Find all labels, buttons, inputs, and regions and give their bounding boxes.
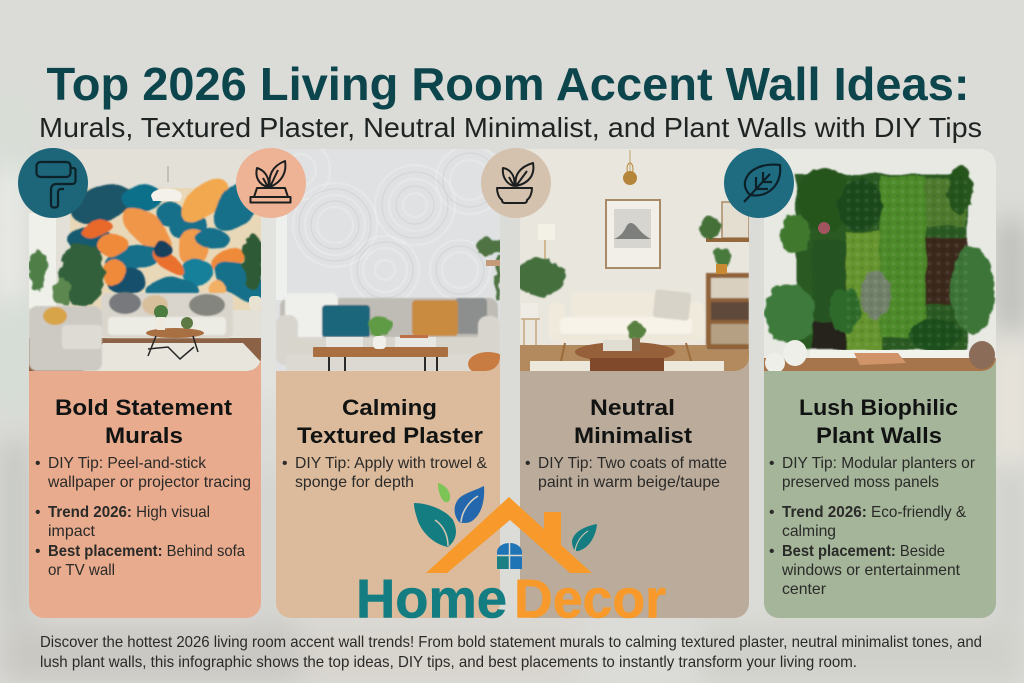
heading: Neutral <box>590 395 675 420</box>
heading <box>297 395 483 448</box>
tips: sponge for depth <box>295 474 414 491</box>
heading: Bold Statement <box>55 395 233 420</box>
footer description: Discover the hottest 2026 living room accent wall trends! From bold statement murals to calming textured plaster, neutral minimalist tones, and <box>40 634 982 651</box>
tips: wallpaper or projector tracing <box>47 474 251 491</box>
sofa <box>276 293 500 371</box>
heading: Lush Biophilic <box>799 395 958 420</box>
footer description <box>40 634 982 671</box>
photo: moss plant wall <box>764 149 996 373</box>
photo: plaster wall <box>276 149 500 371</box>
logo: HomeDecor <box>356 483 666 630</box>
floor and rug <box>29 338 261 371</box>
subtitle: Murals, Textured Plaster, Neutral Minimalist, and Plant Walls with DIY Tips <box>39 112 982 143</box>
tips: DIY Tip: Modular planters or <box>782 455 975 472</box>
leaves <box>414 483 597 551</box>
panel: calming textured plaster <box>270 140 508 618</box>
icon: plant in bowl <box>481 148 551 218</box>
tips: DIY Tip: Peel-and-stick <box>48 455 206 472</box>
footer description: lush plant walls, this infographic shows the top ideas, DIY tips, and best placements to instantly transform your living room. <box>40 654 857 671</box>
icon: leaf <box>724 148 794 218</box>
heading <box>799 395 958 448</box>
tips: windows or entertainment <box>781 562 961 579</box>
tips: paint in warm beige/taupe <box>538 474 720 491</box>
wordmark <box>356 568 666 630</box>
photo: minimalist room <box>515 149 749 373</box>
heading <box>574 395 693 448</box>
tips <box>769 455 975 598</box>
wordmark: Decor <box>514 568 666 630</box>
panel: bold statement murals <box>29 149 272 618</box>
tips <box>35 455 251 579</box>
tips: • <box>35 455 41 472</box>
heading: Textured Plaster <box>297 423 483 448</box>
heading: Plant Walls <box>816 423 942 448</box>
heading: Minimalist <box>574 423 693 448</box>
tips <box>525 455 727 491</box>
tips: • <box>769 455 775 472</box>
tips: • <box>35 504 41 521</box>
panel: lush biophilic plant walls <box>764 149 996 618</box>
tips: • <box>769 543 775 560</box>
ceiling lamp <box>167 166 169 182</box>
tips: preserved moss panels <box>782 474 939 491</box>
coffee table <box>146 328 204 338</box>
tips: Trend 2026: High visual <box>48 504 210 521</box>
mural <box>66 178 261 310</box>
roof <box>426 497 592 573</box>
tips: center <box>782 581 826 598</box>
tips: DIY Tip: Apply with trowel & <box>295 455 487 472</box>
sofa <box>29 292 233 371</box>
panel: neutral minimalist <box>515 149 749 618</box>
title: Top 2026 Living Room Accent Wall Ideas: <box>46 58 970 110</box>
wordmark: Home <box>356 568 507 630</box>
tips: DIY Tip: Two coats of matte <box>538 455 727 472</box>
tips: impact <box>48 523 96 540</box>
tips: or TV wall <box>48 562 115 579</box>
tips: Trend 2026: Eco-friendly & <box>782 504 966 521</box>
heading: Murals <box>105 423 183 448</box>
coffee table <box>313 347 448 357</box>
tips: Best placement: Behind sofa <box>48 543 245 560</box>
icon: paint roller <box>18 148 88 218</box>
tips: calming <box>782 523 836 540</box>
plant <box>475 235 500 302</box>
icon: plant on plaster block <box>236 148 306 218</box>
tips: • <box>282 455 288 472</box>
tips: • <box>35 543 41 560</box>
photo: mural living room <box>29 149 272 371</box>
window <box>497 543 522 569</box>
tips <box>282 455 487 491</box>
plants <box>29 234 263 307</box>
tips: • <box>769 504 775 521</box>
tips: Best placement: Beside <box>782 543 945 560</box>
heading: Calming <box>342 395 437 420</box>
heading <box>55 395 233 448</box>
tips: • <box>525 455 531 472</box>
